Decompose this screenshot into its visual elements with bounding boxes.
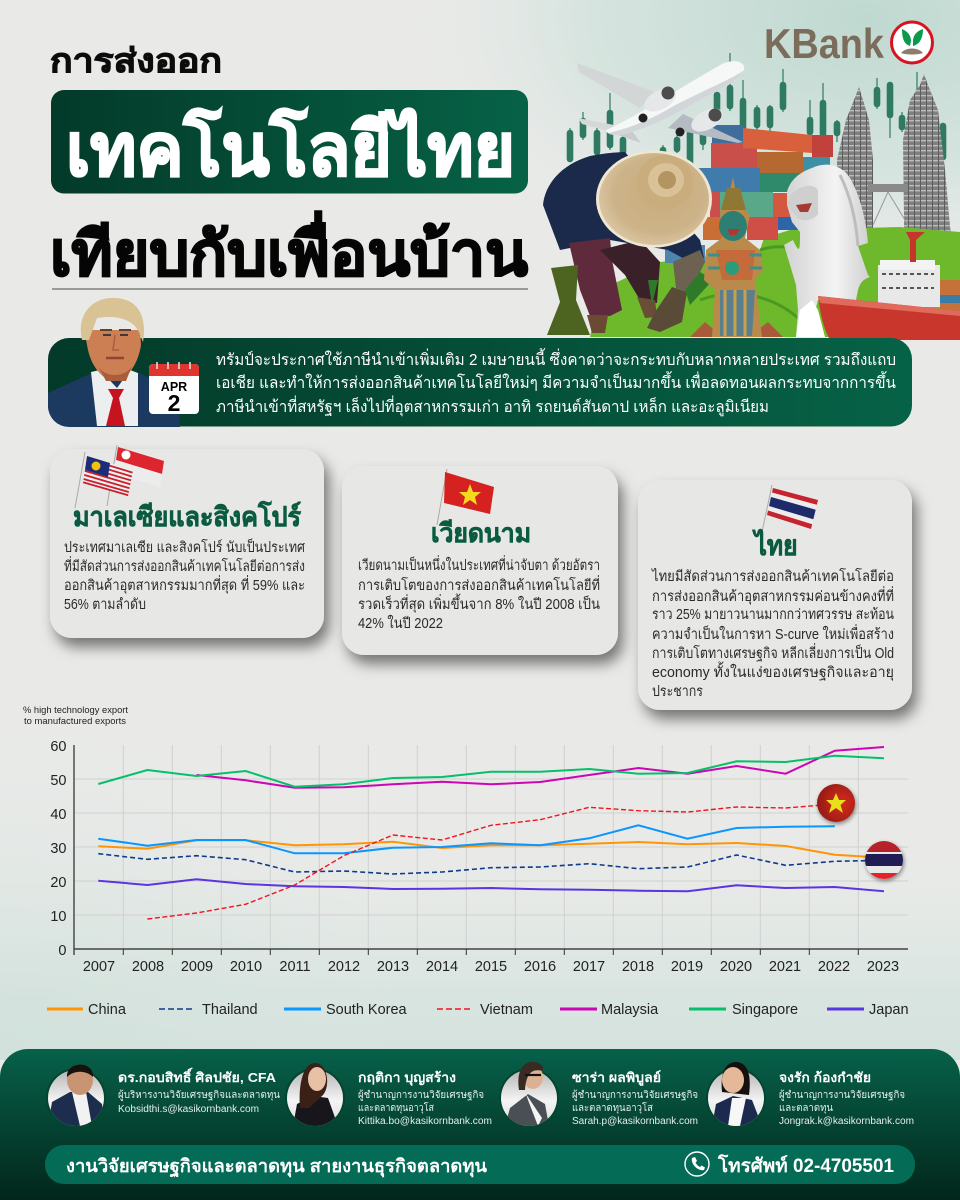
chart unit label: to manufactured exports xyxy=(24,716,127,726)
chart legend: Japan xyxy=(869,1002,909,1018)
x axis labels xyxy=(83,959,899,975)
contact pill xyxy=(45,1145,915,1184)
analyst 1: ดร.กอบสิทธิ์ ศิลปชัย, CFA xyxy=(118,1067,277,1085)
chart legend: Singapore xyxy=(732,1002,798,1018)
title underline xyxy=(52,288,528,290)
card: Malaysia and Singapore: ประเทศมาเลเซีย และสิงคโปร์ นับเป็นประเทศ xyxy=(64,537,306,556)
analyst 2: Kittika.bo@kasikornbank.com xyxy=(358,1116,492,1127)
x axis labels: 2018 xyxy=(622,959,654,975)
twin towers xyxy=(837,74,960,300)
analyst 2: และตลาดทุนอาวุโส xyxy=(358,1101,434,1114)
card: Thailand: การเติบโตทางเศรษฐกิจ หลีกเลี่ยงการเป็น Old xyxy=(652,643,894,662)
series: Thailand xyxy=(98,854,884,874)
card: Thailand: ราว 25% มายาวนานมากกว่าทศวรรษ สะท้อน xyxy=(652,606,894,623)
marker: Vietnam flag xyxy=(817,784,855,822)
analyst 2: กฤติกา บุญสร้าง xyxy=(358,1070,456,1086)
series: China xyxy=(98,840,884,858)
card: Vietnam: เวียดนามเป็นหนึ่งในประเทศที่น่าจับตา ด้วยอัตรา xyxy=(358,555,600,574)
chart legend xyxy=(47,1002,909,1018)
analyst 3: ซาร่า ผลพิบูลย์ xyxy=(572,1070,661,1086)
x axis labels: 2009 xyxy=(181,959,213,975)
card: Thailand xyxy=(638,480,912,710)
analyst 4: ผู้ชำนาญการงานวิจัยเศรษฐกิจ xyxy=(779,1089,905,1101)
banner: tariff announcement xyxy=(48,298,912,427)
calendar icon: Apr 2 xyxy=(149,362,199,416)
card: Malaysia and Singapore: ที่มีสัดส่วนการส่งออกสินค้าเทคโนโลยีต่อการส่ง xyxy=(64,556,305,575)
y axis labels: 0 xyxy=(58,943,66,959)
x axis labels: 2017 xyxy=(573,959,605,975)
x axis labels: 2015 xyxy=(475,959,507,975)
farmer xyxy=(543,150,713,333)
y axis labels: 10 xyxy=(50,909,66,925)
card: Thailand: ไทย xyxy=(752,529,798,561)
x axis labels: 2023 xyxy=(867,959,899,975)
x axis labels: 2011 xyxy=(279,959,311,975)
contact pill: งานวิจัยเศรษฐกิจและตลาดทุน สายงานธุรกิจตลาดทุน xyxy=(66,1156,488,1178)
footer panel xyxy=(0,1049,960,1200)
x axis labels: 2019 xyxy=(671,959,703,975)
analyst 1: ผู้บริหารงานวิจัยเศรษฐกิจและตลาดทุน xyxy=(118,1089,280,1101)
marker: Thailand flag xyxy=(865,841,903,880)
logo: KBank: KBank xyxy=(764,20,885,67)
banner text: เอเชีย และทำให้การส่งออกสินค้าเทคโนโลยีใหม่ๆ มีความจำเป็นมากขึ้น เพื่อลดทอนผลกระทบจากการขึ้น xyxy=(216,371,896,392)
series: Japan xyxy=(98,879,884,891)
chart legend: Malaysia xyxy=(601,1002,659,1018)
analyst 3 xyxy=(499,1062,698,1128)
x axis labels: 2012 xyxy=(328,959,360,975)
y axis labels: 50 xyxy=(50,773,66,789)
card: Vietnam: 42% ในปี 2022 xyxy=(358,614,443,632)
flags: Malaysia and Singapore xyxy=(75,445,164,508)
y axis labels: 20 xyxy=(50,875,66,891)
card: Vietnam: เวียดนาม xyxy=(431,518,531,548)
card: Vietnam: การเติบโตของการส่งออกสินค้าเทคโนโลยีที่ xyxy=(358,575,600,594)
x axis labels: 2020 xyxy=(720,959,752,975)
chart legend: South Korea xyxy=(326,1002,408,1018)
series: Malaysia xyxy=(196,747,884,788)
analyst 3: ผู้ชำนาญการงานวิจัยเศรษฐกิจ xyxy=(572,1089,698,1101)
x axis labels: 2007 xyxy=(83,959,115,975)
title highlight box: เทคโนโลยีไทย xyxy=(66,107,515,191)
title line 1: การส่งออก xyxy=(50,42,222,79)
shipping containers xyxy=(665,125,833,263)
illustration: export collage xyxy=(543,53,960,340)
card: Thailand: การส่งออกสินค้าอุตสาหกรรมค่อนข้างคงที่ที่ xyxy=(652,586,894,605)
analyst 3: และตลาดทุนอาวุโส xyxy=(572,1101,653,1114)
flag: Vietnam xyxy=(437,469,494,525)
banner text: ภาษีนำเข้าที่สหรัฐฯ เล็งไปที่อุตสาหกรรมเก่า อาทิ รถยนต์สันดาป เหล็ก และอะลูมิเนียม xyxy=(216,395,769,417)
series: Singapore xyxy=(98,756,884,787)
analyst 4: และตลาดทุน xyxy=(779,1103,833,1114)
analyst 4: จงรัก ก้องกำชัย xyxy=(779,1070,871,1085)
card: Vietnam: รวดเร็วที่สุด เพิ่มขึ้นจาก 8% ในปี 2008 เป็น xyxy=(358,593,600,613)
series: South Korea xyxy=(98,825,835,853)
y axis labels: 60 xyxy=(50,739,66,755)
series: Vietnam xyxy=(147,804,835,919)
rice bundle xyxy=(547,265,590,335)
rice field xyxy=(590,227,960,337)
icon: phone xyxy=(685,1152,709,1176)
banner text xyxy=(216,348,896,417)
line chart: high technology export share xyxy=(50,739,908,975)
chart unit label: % high technology export xyxy=(23,705,129,715)
card: Thailand: economy ทั้งในแง่ของเศรษฐกิจและอายุ xyxy=(652,661,894,681)
y axis labels: 40 xyxy=(50,807,66,823)
analyst 4: Jongrak.k@kasikornbank.com xyxy=(779,1116,914,1127)
x axis labels: 2022 xyxy=(818,959,850,975)
y axis labels: 30 xyxy=(50,841,66,857)
contact pill: โทรศัพท์ 02-4705501 xyxy=(717,1154,894,1177)
analyst 2 xyxy=(285,1063,492,1128)
chart legend: Thailand xyxy=(202,1002,258,1018)
merlion statue xyxy=(784,165,870,337)
card: Thailand: ไทยมีสัดส่วนการส่งออกสินค้าเทคโนโลยีต่อ xyxy=(651,567,894,585)
card: Thailand: ความจำเป็นในการหา S-curve ใหม่เพื่อสร้าง xyxy=(652,624,894,643)
card: Malaysia and Singapore: 56% ตามลำดับ xyxy=(64,597,146,613)
card: Malaysia and Singapore: มาเลเซียและสิงคโปร์ xyxy=(73,500,301,532)
ship xyxy=(818,232,960,340)
analyst 3: Sarah.p@kasikornbank.com xyxy=(572,1116,698,1127)
title line 3: เทียบกับเพื่อนบ้าน xyxy=(50,211,528,288)
x axis labels: 2021 xyxy=(769,959,801,975)
card: Thailand: ประชากร xyxy=(652,684,703,700)
x axis labels: 2010 xyxy=(230,959,262,975)
card: Vietnam xyxy=(342,466,618,655)
candlestick chart backdrop xyxy=(567,53,946,168)
analyst 1 xyxy=(46,1065,280,1128)
x axis labels: 2008 xyxy=(132,959,164,975)
card: Malaysia and Singapore: ออกสินค้าอุตสาหกรรมมากที่สุด ที่ 59% และ xyxy=(64,575,305,594)
chart legend: Vietnam xyxy=(480,1002,533,1018)
banner text: ทรัมป์จะประกาศใช้ภาษีนำเข้าเพิ่มเติม 2 เมษายนนี้ ซึ่งคาดว่าจะกระทบกับหลากหลายประเทศ รวมถึงแถบ xyxy=(216,348,896,369)
airplane xyxy=(577,61,744,143)
calendar icon: Apr 2: APR xyxy=(161,380,187,394)
analyst 2: ผู้ชำนาญการงานวิจัยเศรษฐกิจ xyxy=(358,1089,484,1101)
chart unit label xyxy=(23,705,129,726)
portrait xyxy=(48,298,180,427)
chart legend: China xyxy=(88,1002,127,1018)
thai giant statue xyxy=(690,177,783,337)
flag: Thailand xyxy=(762,485,818,532)
x axis labels: 2014 xyxy=(426,959,458,975)
x axis labels: 2016 xyxy=(524,959,556,975)
x axis labels: 2013 xyxy=(377,959,409,975)
analyst 4 xyxy=(706,1062,914,1128)
card: Malaysia and Singapore xyxy=(50,445,324,638)
calendar icon: Apr 2: 2 xyxy=(168,390,180,416)
analyst 1: Kobsidthi.s@kasikornbank.com xyxy=(118,1104,259,1115)
y axis labels xyxy=(50,739,66,959)
